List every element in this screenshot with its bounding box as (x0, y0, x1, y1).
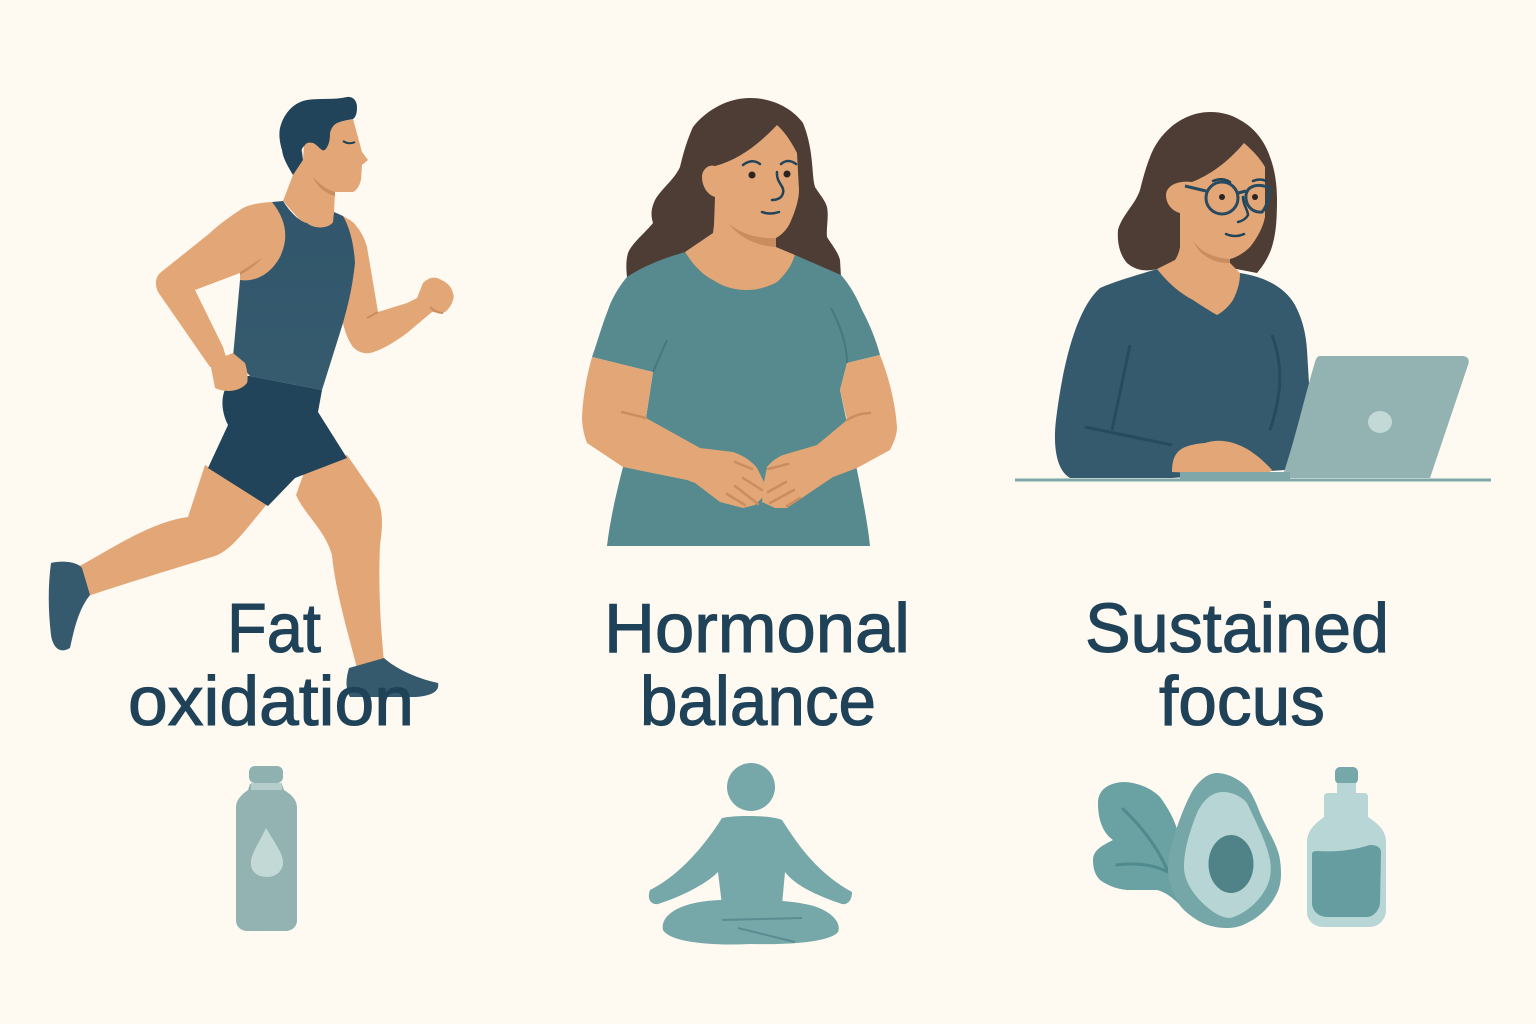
front arm (156, 202, 292, 370)
chin shadow (728, 223, 776, 247)
chin shadow (1193, 240, 1230, 263)
front leg (76, 465, 268, 597)
rear arm (343, 216, 454, 353)
illustration: runner (49, 97, 454, 697)
heading: Sustained focus: Sustained (1085, 589, 1389, 667)
hand details (622, 412, 870, 506)
face and neck (685, 125, 799, 296)
heading: Fat oxidation: Fat (227, 589, 321, 667)
glasses (1185, 182, 1270, 214)
hair (1118, 112, 1277, 273)
face details (748, 172, 756, 178)
fist (210, 353, 248, 391)
sweater (1055, 269, 1310, 478)
icon: meditating figure (649, 763, 852, 944)
face details (343, 141, 355, 143)
heading: Fat oxidation (128, 589, 414, 740)
shirt (592, 252, 880, 546)
heading: Fat oxidation: oxidation (128, 662, 414, 740)
laptop (1282, 356, 1469, 478)
illustration: woman with hands on belly (582, 98, 897, 546)
rear shoe (346, 658, 438, 697)
heading: Sustained focus: focus (1159, 662, 1325, 740)
head (293, 119, 368, 195)
tank top (233, 201, 355, 390)
neck (283, 175, 335, 228)
heading: Hormonal balance: Hormonal (604, 589, 910, 667)
heading: Hormonal balance: balance (640, 662, 876, 740)
icon: leaf, avocado and oil bottle (1093, 767, 1386, 928)
front shoe (49, 562, 90, 650)
shorts (208, 376, 347, 506)
face details (1219, 194, 1225, 200)
oil bottle (1335, 767, 1358, 784)
illustration: woman at laptop (1015, 112, 1491, 480)
hair (626, 98, 841, 277)
heading: Hormonal balance (604, 589, 910, 740)
leaf (1093, 782, 1180, 905)
heading: Sustained focus (1085, 589, 1389, 740)
hand (1172, 441, 1272, 476)
hair (279, 97, 357, 175)
face and neck (1157, 143, 1265, 322)
desk (1015, 478, 1491, 482)
icon: water bottle (236, 766, 297, 931)
avocado (1168, 773, 1281, 928)
right arm and hand (762, 355, 897, 508)
rear leg (296, 455, 384, 672)
left arm and hand (582, 357, 764, 508)
